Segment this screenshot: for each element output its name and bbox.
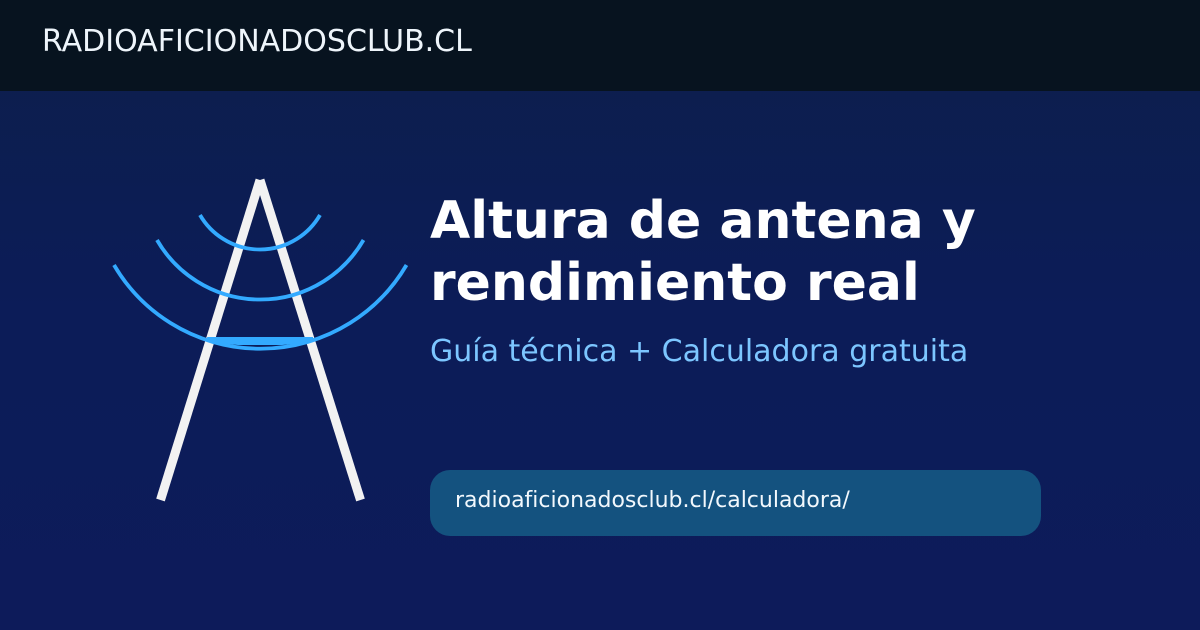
- header bar: [0, 0, 1200, 91]
- subtitle: Guía técnica + Calculadora gratuita: [430, 334, 968, 369]
- url pill: [430, 470, 1041, 536]
- title: Altura de antena y: [430, 191, 976, 251]
- title: [430, 191, 976, 313]
- radio waves: [114, 215, 406, 349]
- antenna mast: [160, 180, 360, 500]
- url text: radioaficionadosclub.cl/calculadora/: [455, 488, 850, 513]
- title: rendimiento real: [430, 253, 920, 313]
- site name: RADIOAFICIONADOSCLUB.CL: [42, 24, 472, 59]
- icon: antenna with radio waves: [112, 178, 408, 502]
